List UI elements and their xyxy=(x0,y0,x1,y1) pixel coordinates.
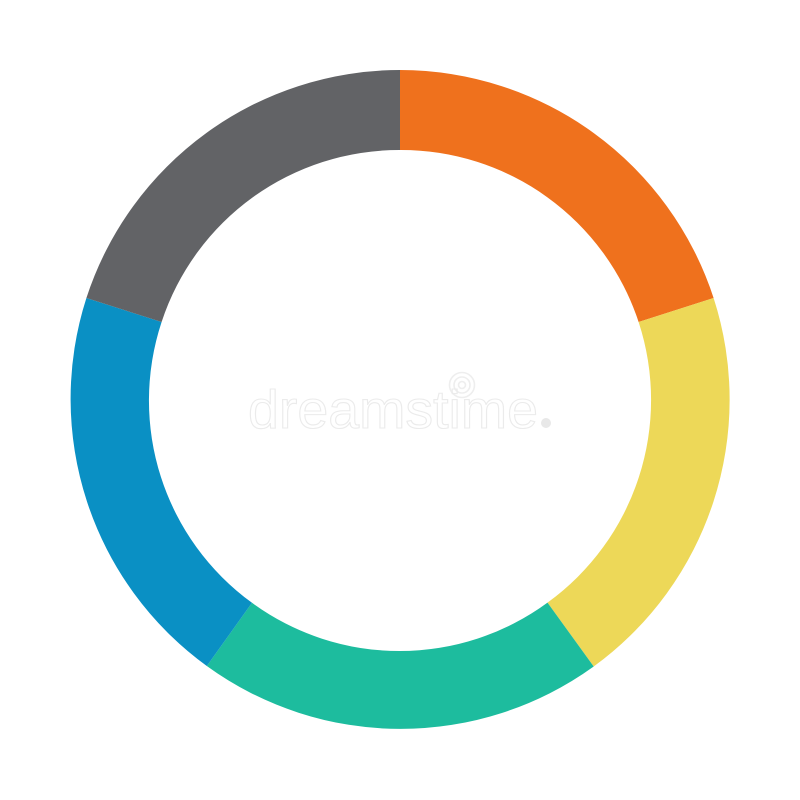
watermark logo xyxy=(450,372,474,398)
segment: teal xyxy=(207,603,594,729)
watermark xyxy=(248,372,551,440)
segment: yellow xyxy=(548,298,730,666)
segment: orange xyxy=(400,70,714,322)
segment: gray xyxy=(86,70,400,322)
donut ring xyxy=(71,70,730,729)
watermark dot xyxy=(541,418,551,428)
segment: blue xyxy=(71,298,252,666)
watermark text: dreamstime xyxy=(248,380,538,440)
